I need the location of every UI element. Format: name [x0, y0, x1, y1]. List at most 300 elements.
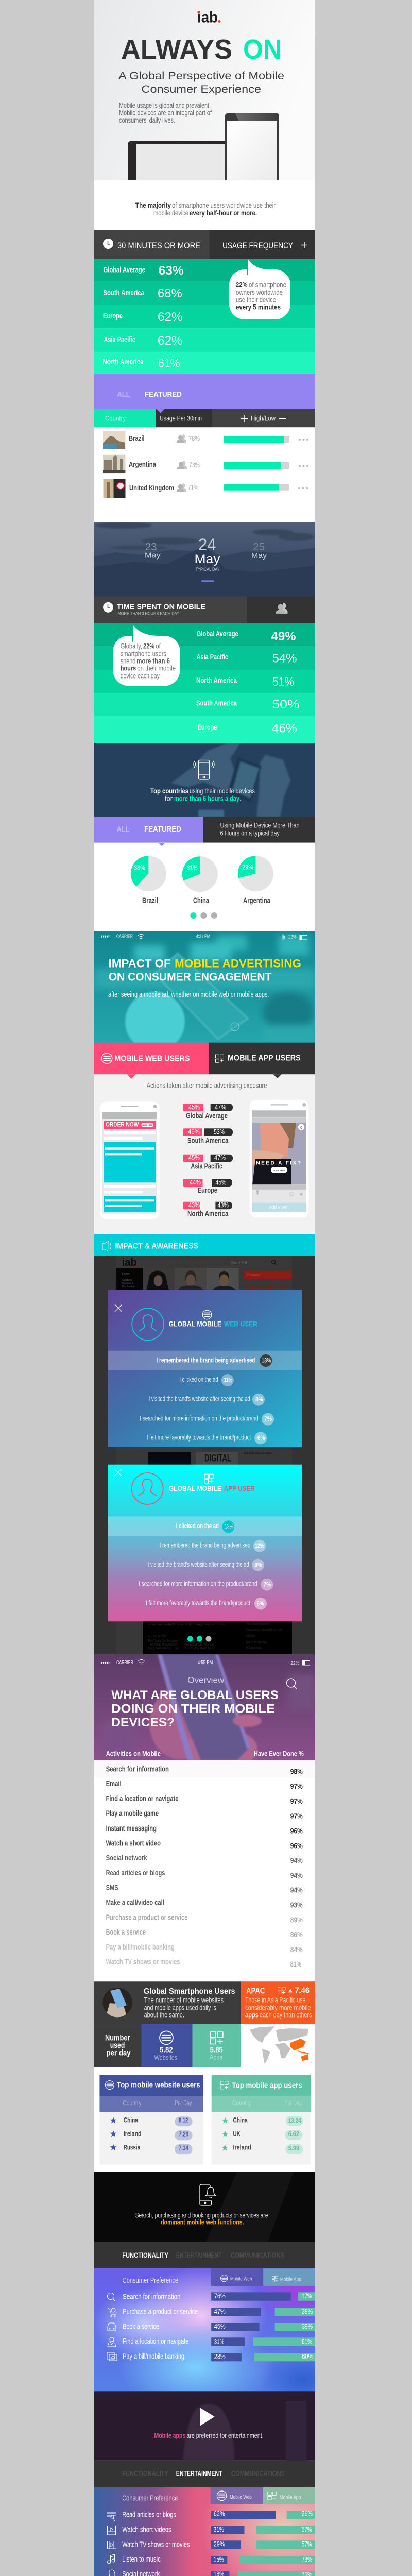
panel: what are global users doing: Overview: [187, 1676, 224, 1685]
icon: close: [115, 1304, 122, 1312]
comparison: North America: North America: [187, 1210, 229, 1218]
phone mockup: mobile app ad: x: [300, 1125, 302, 1130]
section title: WHAT ARE GLOBAL USERS: [111, 1688, 279, 1702]
panel: global smartphone users: and mobile apps used daily is: [144, 2003, 216, 2011]
majority statement: [135, 201, 276, 217]
panel: 30 minute usage by region: 62%: [158, 334, 183, 348]
icon: phone with bell: [200, 2184, 216, 2205]
panel: global smartphone users: Global Smartphone Users: [144, 1987, 235, 1996]
tabs: functionality: FUNCTIONALITY: [122, 2251, 168, 2259]
table: top mobile website users: Top mobile website users: [117, 2081, 200, 2090]
status bar: 22%: [290, 1660, 299, 1666]
panel: top countries photo: [94, 743, 315, 817]
table: activities on mobile: 86%: [290, 1930, 303, 1939]
panel: 30 minute usage by region: 63%: [159, 264, 184, 278]
icon: search: [286, 1679, 297, 1689]
section title: [109, 957, 301, 983]
table header: country usage: Usage Per 30min: [160, 414, 202, 422]
table: activities on mobile: [94, 1760, 315, 1981]
hero panel: [94, 0, 315, 180]
panel: 30 minute usage by region: 68%: [158, 286, 182, 300]
panel: 30 minute usage by region: South America: [103, 289, 145, 297]
row: favorable: [146, 1598, 267, 1610]
comparison: Europe: [183, 1179, 232, 1195]
panel: what are global users doing: Have Ever Done %: [254, 1749, 304, 1757]
comparison: Global Average: 47%: [215, 1103, 226, 1111]
phone mockup: mobile app ad: CLICK HERE: [273, 1168, 285, 1172]
row: searched: [139, 1579, 273, 1591]
dimmed website navigation: Guidelines &: [122, 1282, 133, 1285]
comparison: South America: 53%: [214, 1128, 225, 1136]
panel: what are global users doing: Activities on Mobile: [106, 1749, 161, 1757]
intro paragraph: Mobile usage is global and prevalent.: [119, 101, 211, 109]
table: activities on mobile: 94%: [290, 1871, 303, 1880]
panel: 30 minute usage by region: 62%: [158, 310, 183, 324]
legend: mobile web: [211, 2487, 263, 2504]
panel: dimmed website background: IAB Ad Blocking Report:: [184, 1640, 211, 1643]
modal: global mobile app user: GLOBAL MOBILE: [169, 1484, 221, 1493]
table: activities on mobile: Read articles or blogs: [106, 1869, 165, 1877]
table: activities on mobile: Search for information: [106, 1765, 169, 1773]
tabs: top countries: [94, 817, 315, 843]
phone mockup: mobile web ad: ORDER NOW: [106, 1121, 139, 1128]
row: favorable: 6%: [258, 1434, 265, 1442]
header: time spent on mobile: TIME SPENT ON MOBILE: [117, 603, 205, 612]
status bar: 4:21 PM: [196, 934, 210, 940]
row: clicked: [179, 1374, 234, 1386]
row: visited: [148, 1559, 264, 1571]
pie: China 31%: China: [193, 897, 210, 905]
table: activities on mobile: Purchase a product or service: [106, 1913, 187, 1922]
tabs: entertainment: [94, 2461, 315, 2487]
row: Ireland: 5.99: [288, 2144, 299, 2152]
date: 23 May: 23: [145, 541, 157, 553]
modal: global mobile web user: WEB USER: [224, 1320, 258, 1328]
dimmed website navigation: Standards,: [122, 1279, 132, 1282]
comparison: Asia Pacific: 45%: [188, 1154, 200, 1162]
row: favorable: I felt more favorably towards the brand/product: [146, 1599, 250, 1607]
row: searched: 7%: [264, 1581, 271, 1588]
table: top mobile app users: Top mobile app users: [232, 2082, 302, 2090]
map: Asia Pacific highlighted: [250, 2026, 312, 2064]
row: pay a bill/mobile banking: 28%: [214, 2352, 226, 2360]
caption: using their mobile devices: [190, 787, 255, 795]
comparison: South America: [183, 1128, 233, 1145]
row: searched: I searched for more information on the product/brand: [140, 1414, 259, 1422]
row: read articles or blogs: 26%: [302, 2510, 313, 2517]
panel: entertainment video: [94, 2391, 315, 2461]
row: find a location or navigate: 61%: [302, 2337, 312, 2345]
stat: websites: Websites: [154, 2053, 177, 2061]
pie: Brazil 38%: [131, 856, 166, 905]
panel: global smartphone users: The number of mobile websites: [144, 1996, 224, 2004]
date: 24 May typical day: May: [195, 552, 220, 566]
table: top mobile website users: Country: [123, 2099, 142, 2107]
panel: 30 minute usage by region: Europe: [103, 312, 123, 320]
row: find a location or navigate: 31%: [214, 2337, 224, 2345]
highlighted row: I clicked on the ad: [176, 1522, 219, 1530]
table: activities on mobile: Instant messaging: [106, 1825, 157, 1833]
callout: six hours: of: [156, 641, 161, 650]
tabs: functionality: ENTERTAINMENT: [176, 2251, 222, 2259]
row: purchase a product or service: [108, 2308, 315, 2317]
panel: dimmed website background: Measurement, Viewability and IMG: [246, 1629, 282, 1632]
row: listen to music: [107, 2554, 315, 2564]
table: activities on mobile: Pay a bill/mobile banking: [106, 1943, 175, 1952]
panel: dominant mobile web functions: dominant mobile web functions.: [161, 2218, 244, 2226]
highlighted row: [108, 1516, 302, 1536]
stat: apps: [193, 2024, 241, 2067]
tabs: top countries: Using Mobile Device More Than: [220, 821, 300, 829]
title: ON: [243, 34, 282, 65]
pie: Brazil 38%: Brazil: [142, 897, 158, 905]
tabs: all / featured: FEATURED: [145, 390, 182, 399]
panel: number used per day: Number: [105, 2034, 130, 2043]
date: 25 May: 25: [253, 541, 265, 553]
tabs: functionality: [94, 2242, 315, 2268]
callout: six hours: [113, 625, 180, 686]
panel: dimmed website background: Using Ad Blockers on Their: [148, 1647, 179, 1650]
row: visited: I visited the brand's website after seeing the ad: [148, 1561, 249, 1568]
panel: dimmed website background: Two-Thirds of Consumers: [148, 1643, 178, 1647]
table: activities on mobile: Email: [106, 1780, 122, 1788]
dimmed website portraits: [143, 1268, 239, 1290]
caption: more than 6 hours a day: [174, 794, 239, 803]
header: 30 minutes or more / usage frequency: USAGE FREQUENCY: [222, 241, 293, 250]
row: search for information: Search for information: [123, 2293, 180, 2301]
row: listen to music: Listen to music: [122, 2555, 161, 2564]
panel: APAC callout: considerably more mobile: [245, 2003, 311, 2011]
panel: actions after ad exposure: Actions taken after mobile advertising exposure: [147, 1081, 267, 1090]
table: activities on mobile: 81%: [290, 1960, 301, 1969]
caption: .: [239, 794, 242, 803]
panel: dimmed website background: [94, 1256, 315, 1654]
header: 30 minutes or more / usage frequency: 30 MINUTES OR MORE: [117, 241, 200, 250]
callout: six hours: Globally,: [121, 641, 142, 650]
row: book a service: [108, 2323, 315, 2331]
panel: time spent by region: Global Average: [197, 630, 238, 638]
header: impact and awareness: IMPACT & AWARENESS: [115, 1242, 198, 1250]
chart: functionality preference: [94, 2268, 315, 2392]
date: 24 May typical day: 24: [198, 535, 216, 554]
callout: six hours: device each day.: [121, 671, 161, 680]
row: China: [110, 2115, 193, 2126]
status bar: ●●●●○: [101, 1659, 110, 1666]
tabs: mobile web and app users: [94, 1043, 315, 1074]
callout: every 5 minutes: every 5 minutes: [236, 303, 281, 311]
table: activities on mobile: Make a call/video call: [106, 1899, 164, 1907]
row: purchase a product or service: 39%: [302, 2308, 313, 2315]
comparison: North America: 43%: [217, 1201, 229, 1209]
row: searched: 7%: [264, 1415, 272, 1422]
panel: dominant mobile web functions: Search, purchasing and booking products or services are: [135, 2211, 268, 2219]
row: UK: [222, 2129, 302, 2140]
row: watch short videos: 31%: [214, 2526, 224, 2533]
stat: websites: [141, 2024, 193, 2067]
table: top mobile app users: Country: [232, 2099, 251, 2107]
row: UK: UK: [233, 2129, 241, 2138]
row: book a service: 39%: [302, 2323, 313, 2330]
row: China: 13.24: [288, 2116, 301, 2124]
section subtitle: after seeing a mobile ad, whether on mobile web or mobile apps.: [108, 991, 269, 999]
table: activities on mobile: 98%: [290, 1767, 303, 1776]
panel: time spent by region: Europe: [198, 724, 217, 732]
panel: APAC callout: 7.46: [295, 1986, 310, 1995]
phone mockup: mobile app ad: [250, 1100, 309, 1217]
comparison: South America: South America: [187, 1137, 229, 1145]
section title: MOBILE ADVERTISING: [175, 957, 301, 970]
panel: dimmed website background: DIGITAL: [204, 1453, 231, 1464]
panel: dimmed website background: READ MORE: [148, 1635, 167, 1638]
row: Russia: [110, 2143, 193, 2154]
subtitle: Consumer Experience: [141, 83, 261, 95]
section title: DEVICES?: [111, 1716, 175, 1730]
row: Brazil: 78%: [188, 434, 200, 443]
row: United Kingdom: [103, 479, 308, 498]
majority statement: of smartphone users worldwide use their: [172, 201, 276, 209]
row: book a service: 45%: [214, 2323, 226, 2330]
row: Argentina: [103, 455, 308, 473]
highlighted row: 13%: [262, 1357, 271, 1364]
panel: dimmed website background: See more press releases: [244, 1452, 272, 1455]
table: activities on mobile: 97%: [290, 1812, 303, 1821]
modal: global mobile app user: [108, 1465, 302, 1621]
callout: every 5 minutes: owners worldwide: [236, 288, 283, 296]
comparison: Global Average: Global Average: [186, 1112, 228, 1121]
dimmed website navigation: Home: [122, 1273, 130, 1276]
caption: for: [165, 794, 173, 803]
row: Argentina: 73%: [189, 461, 200, 469]
comparison: Global Average: 45%: [188, 1103, 200, 1111]
callout: every 5 minutes: [229, 259, 290, 319]
panel: time spent by region: Asia Pacific: [197, 653, 228, 662]
title: ALWAYS: [121, 34, 232, 65]
row: clicked: 11%: [224, 1376, 232, 1383]
stat: websites: 5.82: [160, 2045, 173, 2054]
date: 23 May: May: [145, 551, 161, 560]
row: searched: [140, 1413, 274, 1426]
icon: person: [132, 1473, 163, 1504]
panel: APAC callout: APAC: [246, 1986, 265, 1995]
dimmed iab logo: iab: [122, 1257, 137, 1268]
row: watch short videos: Watch short videos: [122, 2526, 171, 2534]
row: searched: I searched for more information on the product/brand: [139, 1580, 258, 1588]
icon: megaphone: [102, 1241, 111, 1251]
callout: six hours: hours: [121, 664, 136, 672]
comparison: Asia Pacific: Asia Pacific: [191, 1162, 222, 1171]
row: search for information: 76%: [214, 2292, 226, 2300]
stat: apps: 5.85: [210, 2045, 223, 2054]
row: China: 8.12: [179, 2116, 188, 2124]
tabs: functionality: COMMUNICATIONS: [231, 2251, 284, 2259]
icon: web: [101, 1053, 112, 1064]
status bar: ●●●●○: [101, 934, 110, 940]
tabs: top countries: 6 Hours on a typical day.: [220, 828, 281, 837]
row: listen to music: 73%: [302, 2556, 312, 2564]
panel: time spent by region: 46%: [272, 722, 297, 736]
highlighted row: I remembered the brand being advertised: [157, 1356, 255, 1364]
comparison: North America: 43%: [188, 1201, 200, 1209]
panel: time spent by region: 49%: [271, 630, 296, 643]
row: read articles or blogs: [107, 2510, 315, 2521]
pie: Brazil 38%: 38%: [134, 864, 145, 872]
highlighted row: 13%: [225, 1523, 234, 1530]
panel: entertainment video: are preferred for entertainment.: [186, 2431, 264, 2439]
icon: clock: [103, 239, 113, 249]
panel: number used per day: per day: [107, 2049, 131, 2058]
row: favorable: 6%: [256, 1600, 264, 1607]
chart: entertainment preference: [94, 2487, 315, 2576]
header: 30 minutes or more / usage frequency: [94, 230, 315, 259]
row: Brazil: [103, 431, 308, 449]
icon: apps: [204, 1474, 213, 1483]
panel: dimmed website background: IAB Ad Revenue Report: [246, 1623, 270, 1626]
table: activities on mobile: 94%: [290, 1856, 303, 1865]
panel: featured countries: [94, 427, 315, 522]
iab logo: iab: [197, 9, 218, 26]
row: search for information: [107, 2292, 315, 2301]
section title: [111, 1688, 279, 1730]
icon: close: [114, 1469, 122, 1476]
panel: dimmed website background: MOBILE ONLY PIONEERS:: [244, 1285, 286, 1290]
icon: apps: [216, 1055, 224, 1062]
table: activities on mobile: Social network: [106, 1854, 147, 1862]
date: 24 May typical day: TYPICAL DAY: [196, 567, 220, 572]
caption: Top countries: [150, 787, 188, 795]
pagination dots: [191, 912, 217, 919]
tabs: top countries: FEATURED: [144, 825, 181, 834]
panel: dimmed website background: Mobile: [246, 1635, 255, 1638]
legend: mobile app: Mobile App: [280, 2495, 301, 2501]
panel: 30 minute usage by region: 61%: [158, 357, 180, 370]
row: watch tv shows or movies: 57%: [302, 2540, 312, 2548]
dimmed website navigation: [116, 1268, 143, 1290]
legend: mobile web: Mobile Web: [230, 2276, 252, 2282]
panel: APAC callout: Those in Asia Pacific use: [245, 1996, 306, 2004]
panel: APAC callout: each day than others: [260, 2011, 312, 2019]
illustration: laptop and phone: [128, 113, 279, 180]
status bar: 22%: [288, 934, 297, 940]
row: visited: I visited the brand's website after seeing the ad: [149, 1395, 250, 1403]
tabs: all / featured: [94, 374, 315, 409]
row: book a service: Book a service: [123, 2323, 159, 2331]
date: 25 May: May: [251, 551, 267, 560]
icon: apps: [220, 2081, 228, 2089]
icon: users: [276, 603, 287, 614]
tabs: entertainment: ENTERTAINMENT: [176, 2470, 222, 2478]
comparison: Asia Pacific: 47%: [214, 1154, 226, 1162]
row: Russia: Russia: [124, 2143, 140, 2151]
row: Ireland: [110, 2129, 193, 2140]
panel: dimmed website background: Programmatic: [246, 1647, 262, 1650]
tabs: all / featured: ALL: [117, 390, 130, 399]
row: clicked: I clicked on the ad: [179, 1376, 218, 1383]
phone mockup: mobile web ad: CLICK HERE: [142, 1124, 153, 1126]
panel: time spent by region: 54%: [272, 652, 297, 666]
row: pay a bill/mobile banking: Pay a bill/mobile banking: [123, 2352, 184, 2361]
comparison: Europe: 44%: [190, 1179, 201, 1187]
row: watch tv shows or movies: 29%: [214, 2540, 225, 2548]
table: activities on mobile: Watch a short video: [106, 1839, 161, 1848]
chart: functionality preference: Consumer Preference: [123, 2277, 178, 2285]
row: pay a bill/mobile banking: [107, 2352, 315, 2361]
caption: [150, 787, 255, 803]
panel: time spent by region: [94, 623, 315, 743]
table: activities on mobile: Watch TV shows or movies: [106, 1958, 180, 1967]
table: activities on mobile: 97%: [290, 1797, 303, 1806]
row: watch tv shows or movies: [107, 2540, 315, 2549]
panel: dimmed website background: Five Tactics Can Persuade: [148, 1640, 178, 1643]
callout: every 5 minutes: of smartphone: [249, 281, 286, 289]
panel: number used per day: [94, 2024, 241, 2067]
row: favorable: [147, 1432, 267, 1444]
panel: time spent by region: South America: [196, 700, 237, 708]
tabs: mobile web and app users: MOBILE WEB USERS: [114, 1054, 190, 1063]
modal: global mobile web user: GLOBAL MOBILE: [169, 1320, 221, 1328]
row: Argentina: Argentina: [129, 461, 157, 469]
row: Ireland: 7.29: [179, 2130, 188, 2138]
pie: China 31%: 31%: [187, 864, 198, 872]
panel: impact of mobile advertising: [94, 931, 315, 1052]
status bar: CARRIER: [116, 934, 133, 940]
table header: country usage: High/Low: [251, 414, 276, 422]
comparison: South America: 49%: [188, 1128, 200, 1136]
panel: global smartphone users: [94, 1981, 241, 2024]
row: favorable: I felt more favorably towards the brand/product: [147, 1434, 251, 1442]
table header: country usage: Country: [105, 414, 126, 422]
modal: global mobile app user: APP USER: [224, 1484, 255, 1493]
row: visited: 9%: [254, 1561, 262, 1568]
table: activities on mobile: 84%: [290, 1945, 303, 1954]
row: China: China: [124, 2115, 138, 2124]
icon: web: [202, 1310, 212, 1319]
row: visited: 8%: [255, 1396, 263, 1403]
icon: person: [132, 1308, 164, 1340]
table: activities on mobile: Book a service: [106, 1928, 146, 1937]
row: China: China: [233, 2115, 248, 2124]
callout: six hours: 22%: [143, 641, 154, 650]
pagination dots: [187, 1636, 211, 1641]
row: listen to music: 15%: [214, 2556, 224, 2564]
table: top mobile app users: [212, 2075, 311, 2165]
row: social network: [108, 2570, 315, 2576]
row: Ireland: Ireland: [233, 2143, 251, 2151]
panel: dimmed website background: Featured: [247, 1273, 261, 1277]
pie: China 31%: [182, 856, 218, 905]
phone mockup: mobile app ad: NEED A FIX?: [256, 1161, 301, 1166]
intro paragraph: Mobile devices are an integral part of: [119, 109, 212, 116]
row: Ireland: Ireland: [124, 2129, 141, 2138]
phone mockup: mobile app ad: add event: [269, 1205, 289, 1211]
table: activities on mobile: Find a location or navigate: [106, 1795, 178, 1803]
highlighted row: [108, 1351, 302, 1370]
callout: six hours: smartphone users: [121, 649, 166, 657]
subtitle: [118, 70, 284, 95]
row: purchase a product or service: 47%: [214, 2308, 226, 2315]
panel: white band behind map and tables: [94, 2024, 315, 2172]
row: read articles or blogs: Read articles or blogs: [122, 2511, 176, 2519]
comparison: Global Average: [183, 1103, 233, 1121]
section title: IMPACT OF: [109, 957, 171, 970]
panel: typical day mountain photo: [94, 522, 315, 597]
table: activities on mobile: 93%: [290, 1901, 303, 1909]
icon: apps: [278, 1987, 285, 1994]
callout: six hours: spend: [121, 657, 135, 665]
callout: six hours: on their mobile: [137, 664, 176, 672]
row: UK: 6.62: [288, 2130, 299, 2138]
status bar: [101, 1659, 310, 1666]
table: activities on mobile: 97%: [290, 1782, 303, 1791]
